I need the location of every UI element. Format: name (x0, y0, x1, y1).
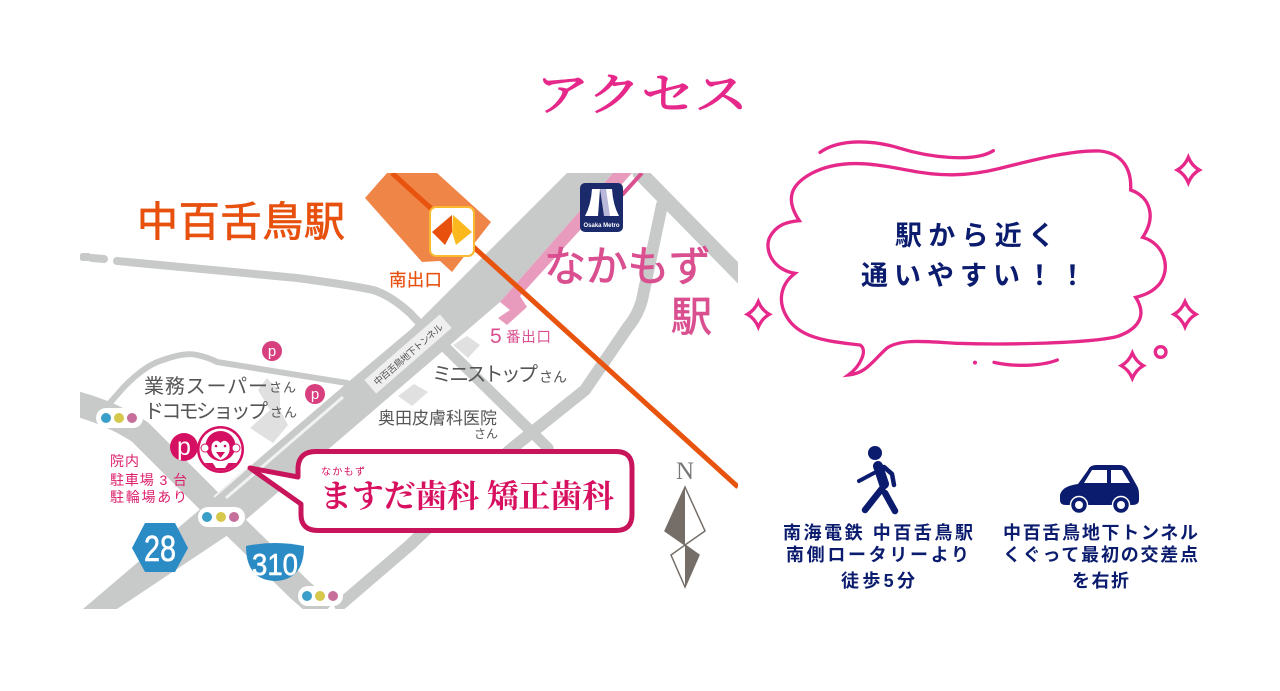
driving directions text: くぐって最初の交差点 (1003, 545, 1198, 565)
signal: bottom (298, 586, 343, 606)
tunnel label strip: 中百舌鳥地下トンネル (372, 321, 446, 388)
pink metro band (498, 173, 632, 325)
route 28 sign: 28 (144, 528, 176, 569)
compass: N (676, 458, 694, 485)
label: parking note: 院内 (110, 453, 139, 469)
driving directions text (1003, 522, 1198, 591)
icon: Nankai logo (430, 207, 474, 256)
exit label: south: 南出口 (389, 270, 442, 290)
route 28 sign (132, 523, 188, 572)
parking marker 1 (262, 341, 282, 361)
walking directions text (783, 522, 973, 591)
station name: Nakamozu subway: 駅 (671, 294, 712, 340)
Nakamozu station orange block (365, 173, 491, 272)
bubble text (861, 221, 1086, 291)
icon: walking person (859, 446, 895, 511)
title: アクセス (536, 70, 748, 120)
station name: Nakamozu subway (544, 243, 712, 340)
label: parking note: 駐車場 3 台 (110, 472, 187, 488)
label: Docomo shop: ドコモショップ (144, 401, 268, 423)
icon: monkey mascot (197, 426, 244, 475)
exit label: no.5 (490, 328, 550, 344)
driving directions text: を右折 (1072, 571, 1129, 591)
label: Okuda clinic: 奥田皮膚科医院 (378, 409, 497, 428)
label: Okuda clinic: さん (474, 427, 498, 441)
label: Docomo shop (150, 401, 296, 420)
walking directions text: 南側ロータリーより (786, 545, 969, 565)
signal: centre (198, 507, 245, 527)
exit label: no.5: 番出口 (506, 329, 551, 346)
walking directions text: 南海電鉄 中百舌鳥駅 (783, 522, 973, 543)
label: Gyomu Super: さん (269, 380, 296, 395)
panel: access map (70, 173, 745, 612)
walking directions text: 徒歩5分 (841, 571, 915, 591)
label: Gyomu Super: 業務スーパー (144, 375, 268, 398)
label: Mini Stop: ミニストップ (432, 364, 538, 386)
parking marker 2: p (311, 386, 319, 403)
exit label: no.5: 5 (490, 325, 502, 348)
callout: clinic name: なかもず (321, 466, 365, 478)
signal: left (96, 408, 143, 428)
label: parking note: 駐輪場あり (110, 489, 187, 505)
bubble text: 通いやすい！！ (861, 261, 1086, 291)
railway line (392, 173, 738, 487)
label: parking note (110, 453, 187, 505)
parking marker 1: p (268, 343, 276, 360)
icon: Osaka Metro logo: Osaka Metro (583, 223, 620, 229)
label: Docomo shop: さん (270, 405, 297, 420)
label: Mini Stop (435, 364, 566, 383)
bubble text: 駅から近く (895, 221, 1055, 251)
icon: parking (170, 433, 198, 461)
label: Okuda clinic (378, 409, 498, 441)
station name: Nakamozu subway: なかもず (544, 243, 711, 290)
roads (70, 173, 745, 612)
label: Mini Stop: さん (539, 369, 567, 385)
speech bubble (747, 142, 1199, 378)
icon: parking: p (177, 433, 191, 461)
callout: clinic name (250, 452, 632, 530)
parking marker 2 (305, 384, 325, 404)
callout: clinic name: ますだ歯科 矯正歯科 (320, 478, 614, 514)
compass (665, 458, 705, 587)
white lane lines (226, 397, 343, 498)
buildings (250, 336, 480, 443)
station name: Nakamozu: 中百舌鳥駅 (137, 199, 345, 245)
icon: car (1060, 465, 1139, 514)
route 310 sign: 310 (252, 547, 298, 582)
icon: Osaka Metro logo (580, 183, 623, 232)
driving directions text: 中百舌鳥地下トンネル (1003, 522, 1198, 543)
